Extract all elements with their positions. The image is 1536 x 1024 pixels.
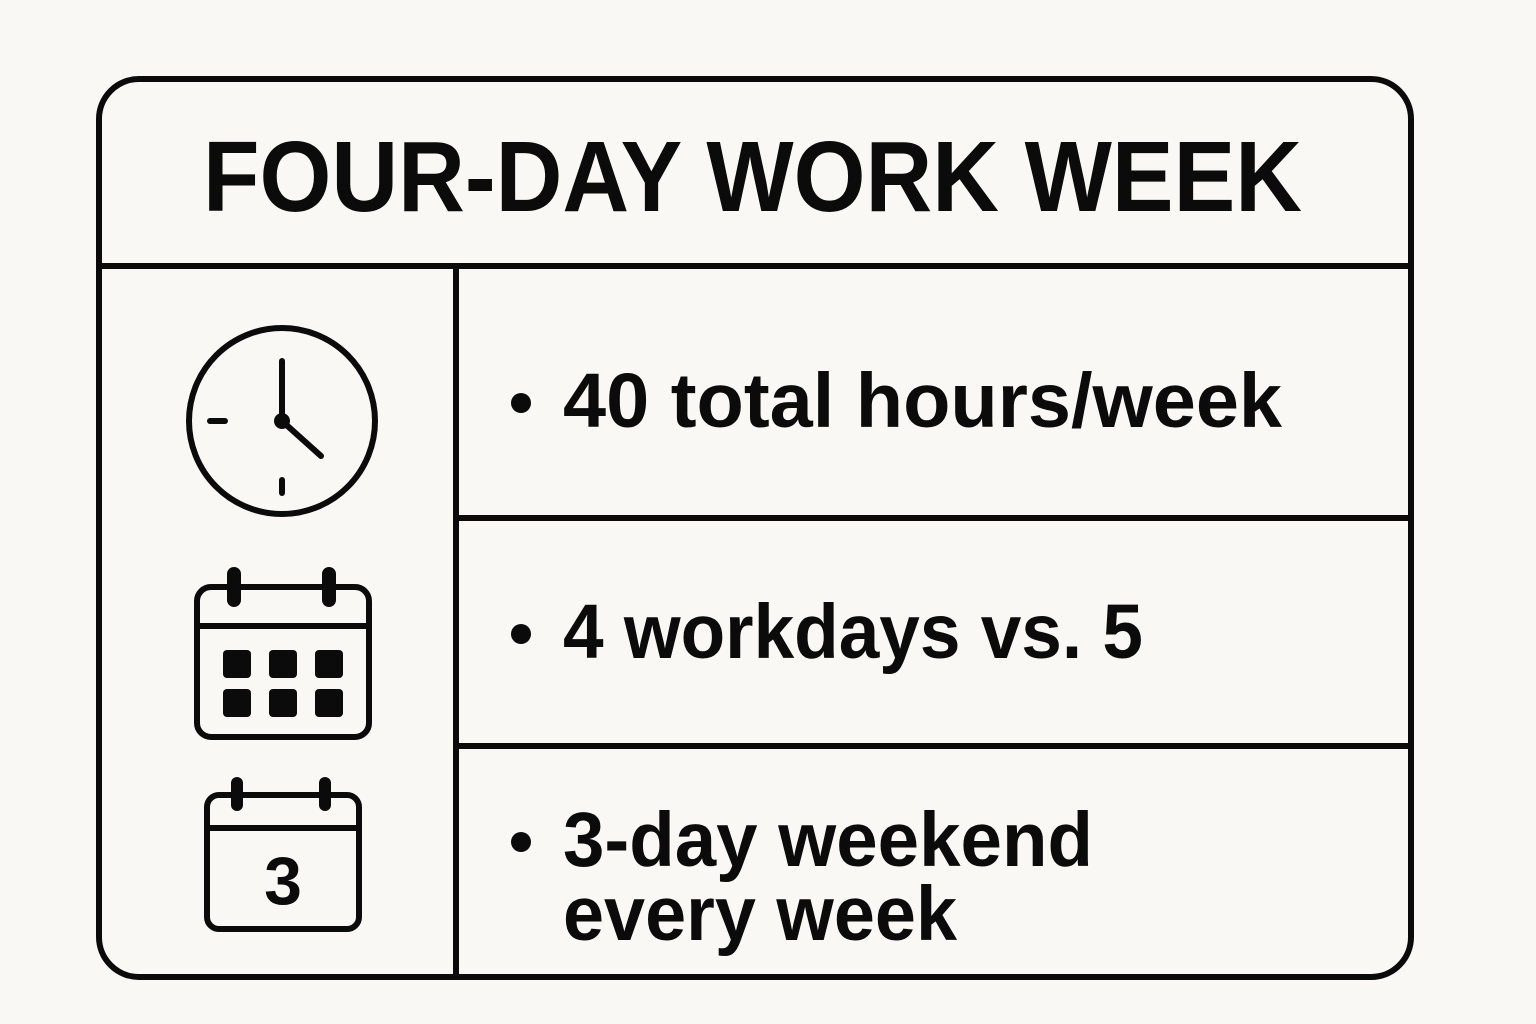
icon: calendar 3-day [207, 777, 359, 929]
text: row 2: 4 workdays vs. 5 [563, 589, 1143, 675]
title: FOUR-DAY WORK WEEK [203, 121, 1302, 233]
icon: clock [189, 328, 375, 514]
text: row 1: 40 total hours/week [563, 358, 1282, 444]
text: row 3: 3-day weekend [563, 797, 1093, 883]
icon: calendar workdays [197, 567, 369, 737]
text: row 3: every week [563, 871, 957, 957]
panel: outer frame [99, 79, 1411, 977]
text: row 3 [511, 797, 1093, 957]
icon: calendar 3-day: 3 [264, 843, 302, 919]
